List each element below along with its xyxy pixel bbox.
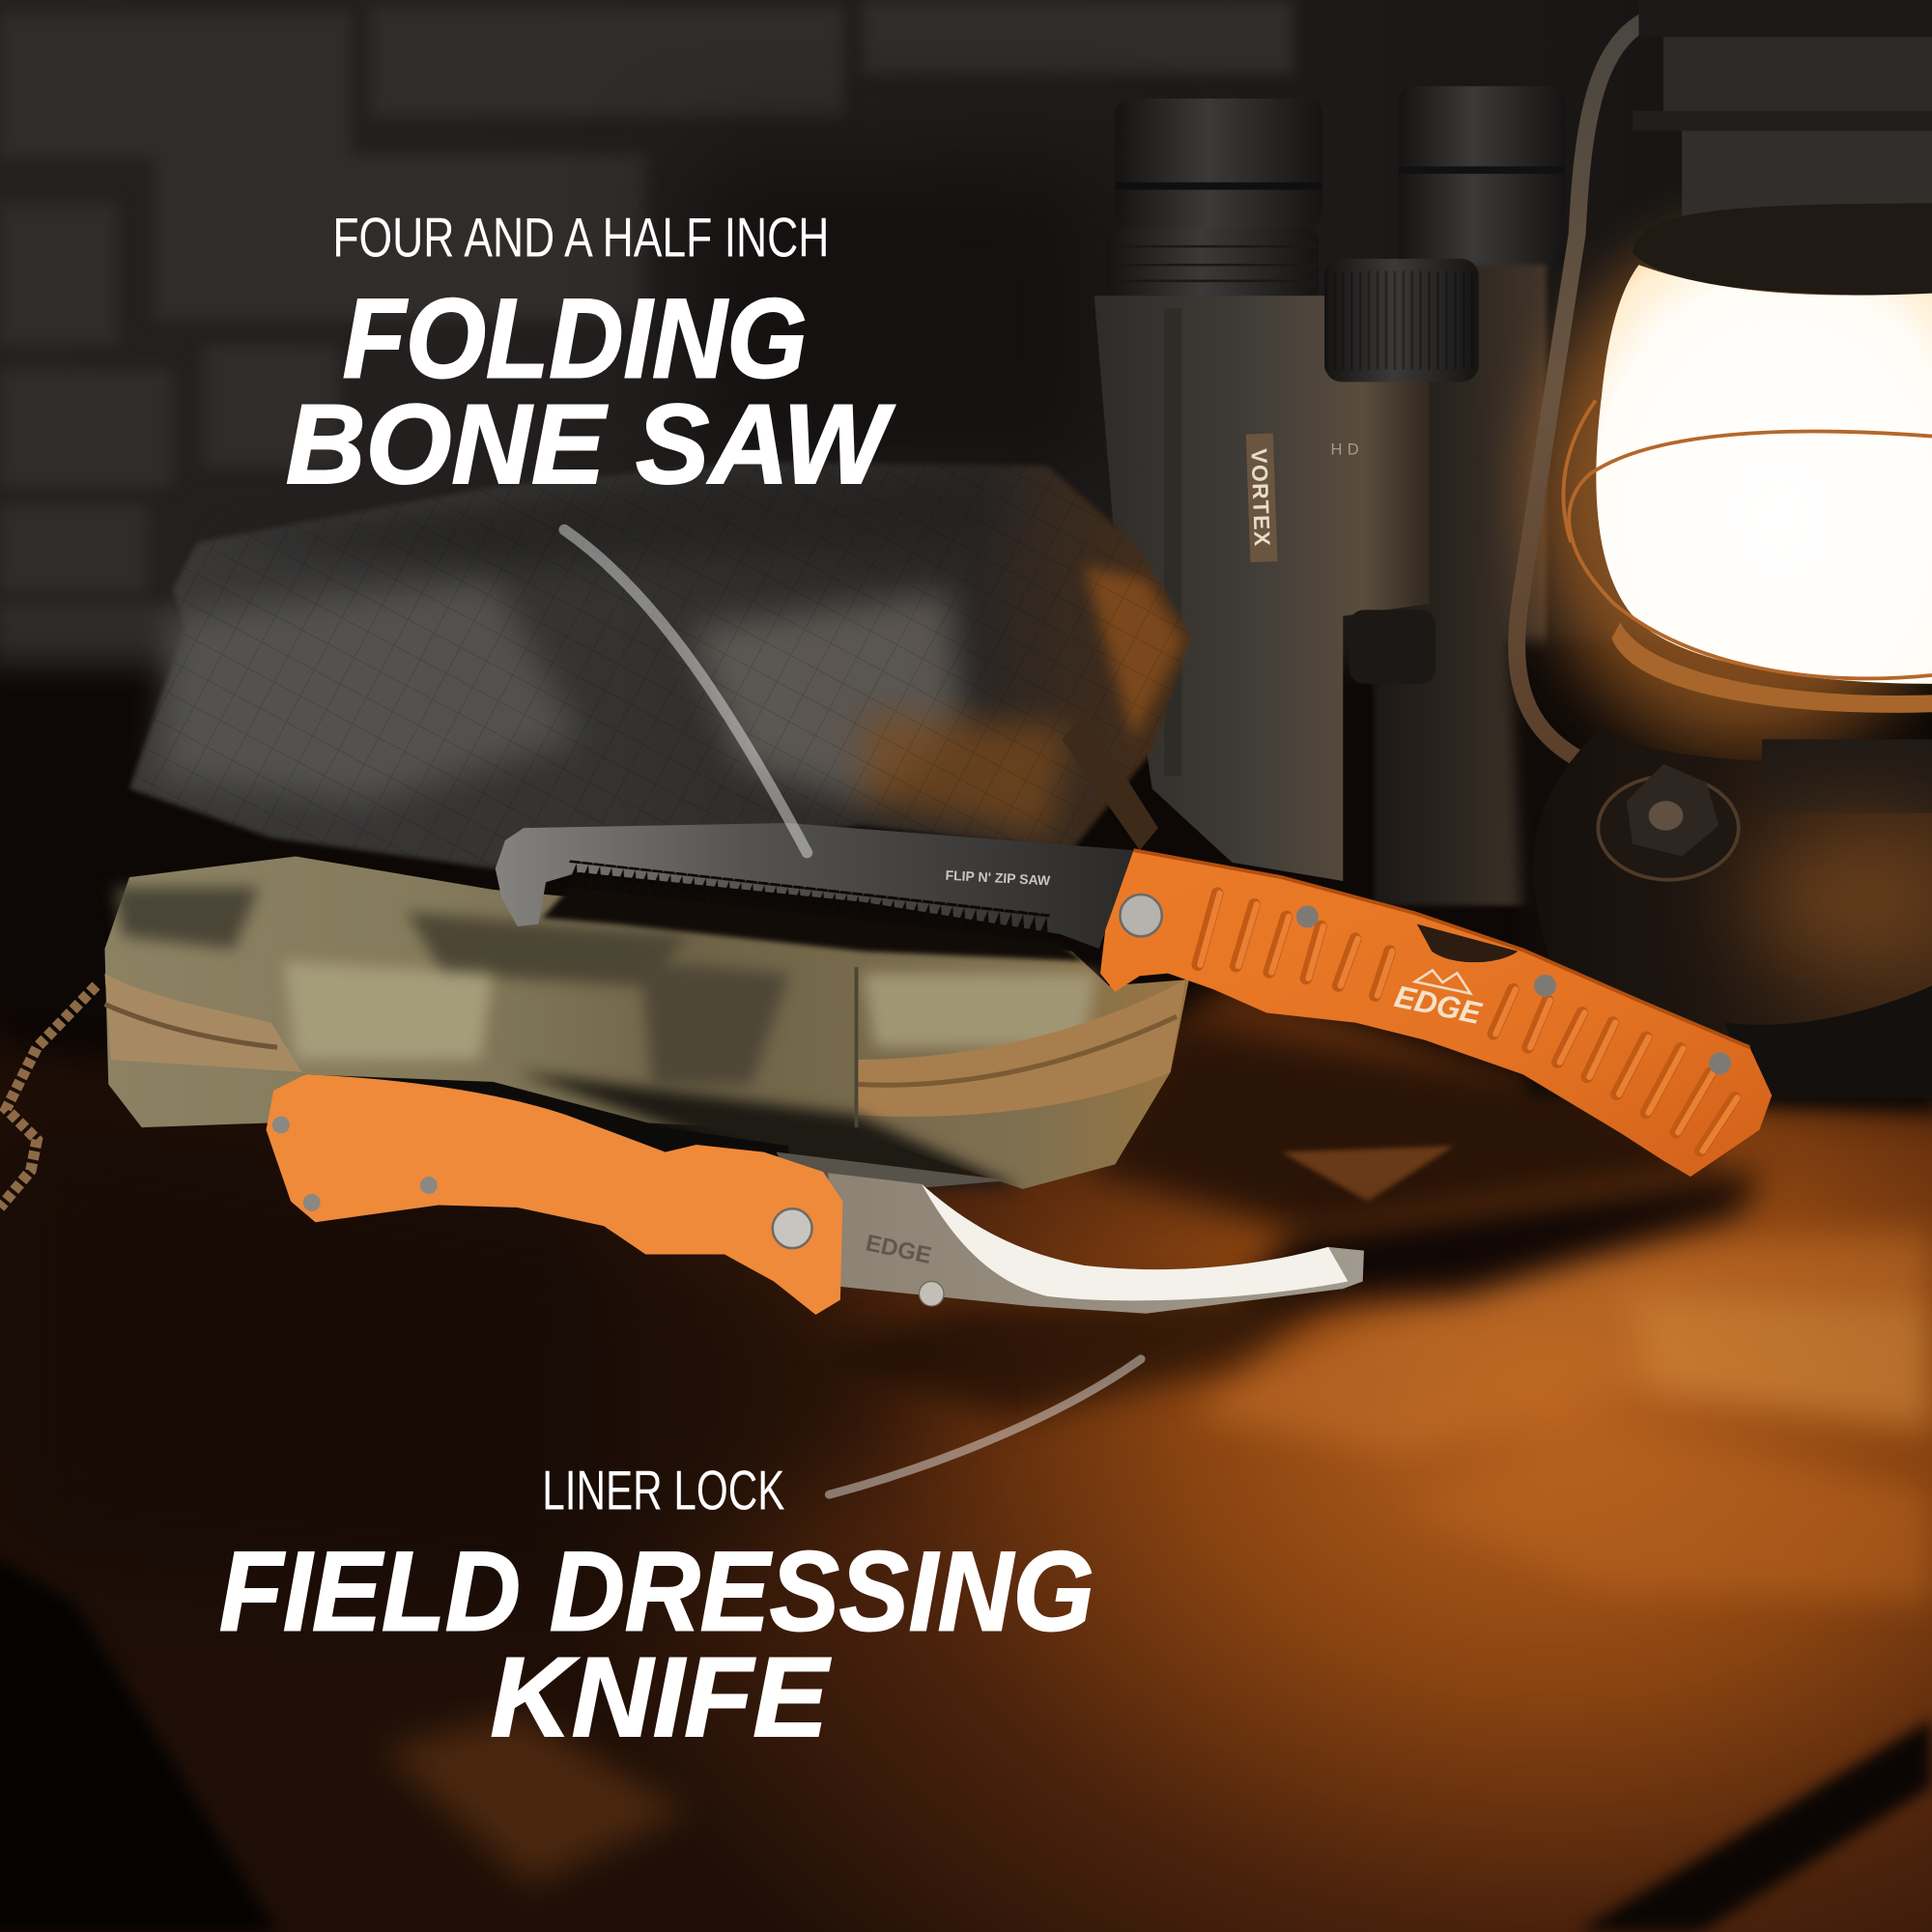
pouch zipper right <box>856 980 1185 1117</box>
lantern frame <box>1517 14 1658 770</box>
pointer line: knife <box>829 1359 1141 1494</box>
pointer line: saw <box>564 529 807 853</box>
title line: knife: KNIFE <box>491 1634 832 1760</box>
lantern wire guards <box>1563 401 1932 678</box>
lantern collar <box>1611 622 1932 713</box>
saw grip grooves <box>1198 894 1737 1151</box>
sack strap <box>1062 712 1158 850</box>
lantern backing dark <box>1509 640 1932 1109</box>
pouch lower dark fold <box>518 1072 1023 1189</box>
ripstop grid <box>129 462 1190 868</box>
saw top edge highlight <box>1133 850 1749 1047</box>
binoculars <box>1094 86 1565 906</box>
knife blade <box>828 1173 1364 1314</box>
title line: field dressing: FIELD DRESSING <box>219 1527 1094 1654</box>
brand: Vortex <box>1246 434 1277 562</box>
title line: folding: FOLDING <box>343 274 807 401</box>
saw pivot and screws <box>1120 895 1731 1074</box>
lantern halo <box>1497 191 1932 795</box>
pouch seam <box>855 967 858 1127</box>
camo pouch <box>0 856 1189 1208</box>
brand: Vortex: VORTEX <box>1246 448 1275 548</box>
gray stuff sack <box>129 462 1190 868</box>
heading: field dressing knife <box>219 1461 1094 1760</box>
glowing globe <box>1596 265 1932 684</box>
subtitle: four and a half inch: FOUR AND A HALF INCH <box>332 207 829 269</box>
lantern base <box>1533 727 1932 1096</box>
knife spine <box>301 1074 788 1164</box>
saw orange handle <box>1100 850 1772 1177</box>
table back shadow <box>0 666 1932 1182</box>
lantern <box>1497 0 1932 1109</box>
saw shadow <box>542 877 1084 961</box>
zipper cord <box>0 985 96 1208</box>
heading: folding bone saw <box>286 207 895 507</box>
lantern knob <box>1598 764 1739 880</box>
knife white edge <box>922 1184 1348 1300</box>
lantern cap <box>1633 0 1932 296</box>
saw finger cutout <box>1417 924 1518 962</box>
right barrel <box>1374 86 1565 906</box>
background: wooden table <box>0 666 1932 1932</box>
knife orange handle <box>267 1074 842 1315</box>
left barrel <box>1094 99 1435 881</box>
background: brick wall <box>0 0 1932 739</box>
pouch zipper left <box>104 974 301 1072</box>
field dressing knife <box>267 1074 1364 1315</box>
knife blade logo: EDGE <box>864 1230 934 1269</box>
subtitle: liner lock: LINER LOCK <box>542 1460 784 1521</box>
focus wheel <box>1324 259 1479 382</box>
knife pivot and screws <box>272 1117 812 1248</box>
knife thumb stud <box>920 1282 944 1306</box>
folding saw <box>496 823 1772 1177</box>
binocular HD mark: HD <box>1331 440 1364 459</box>
title line: bone saw: BONE SAW <box>286 381 895 507</box>
saw logo: EDGE <box>1391 979 1486 1031</box>
saw teeth <box>567 860 1050 941</box>
knife mesh <box>777 1152 1010 1193</box>
saw blade label: FLIP N' ZIP SAW <box>945 867 1051 888</box>
saw blade <box>496 823 1133 949</box>
